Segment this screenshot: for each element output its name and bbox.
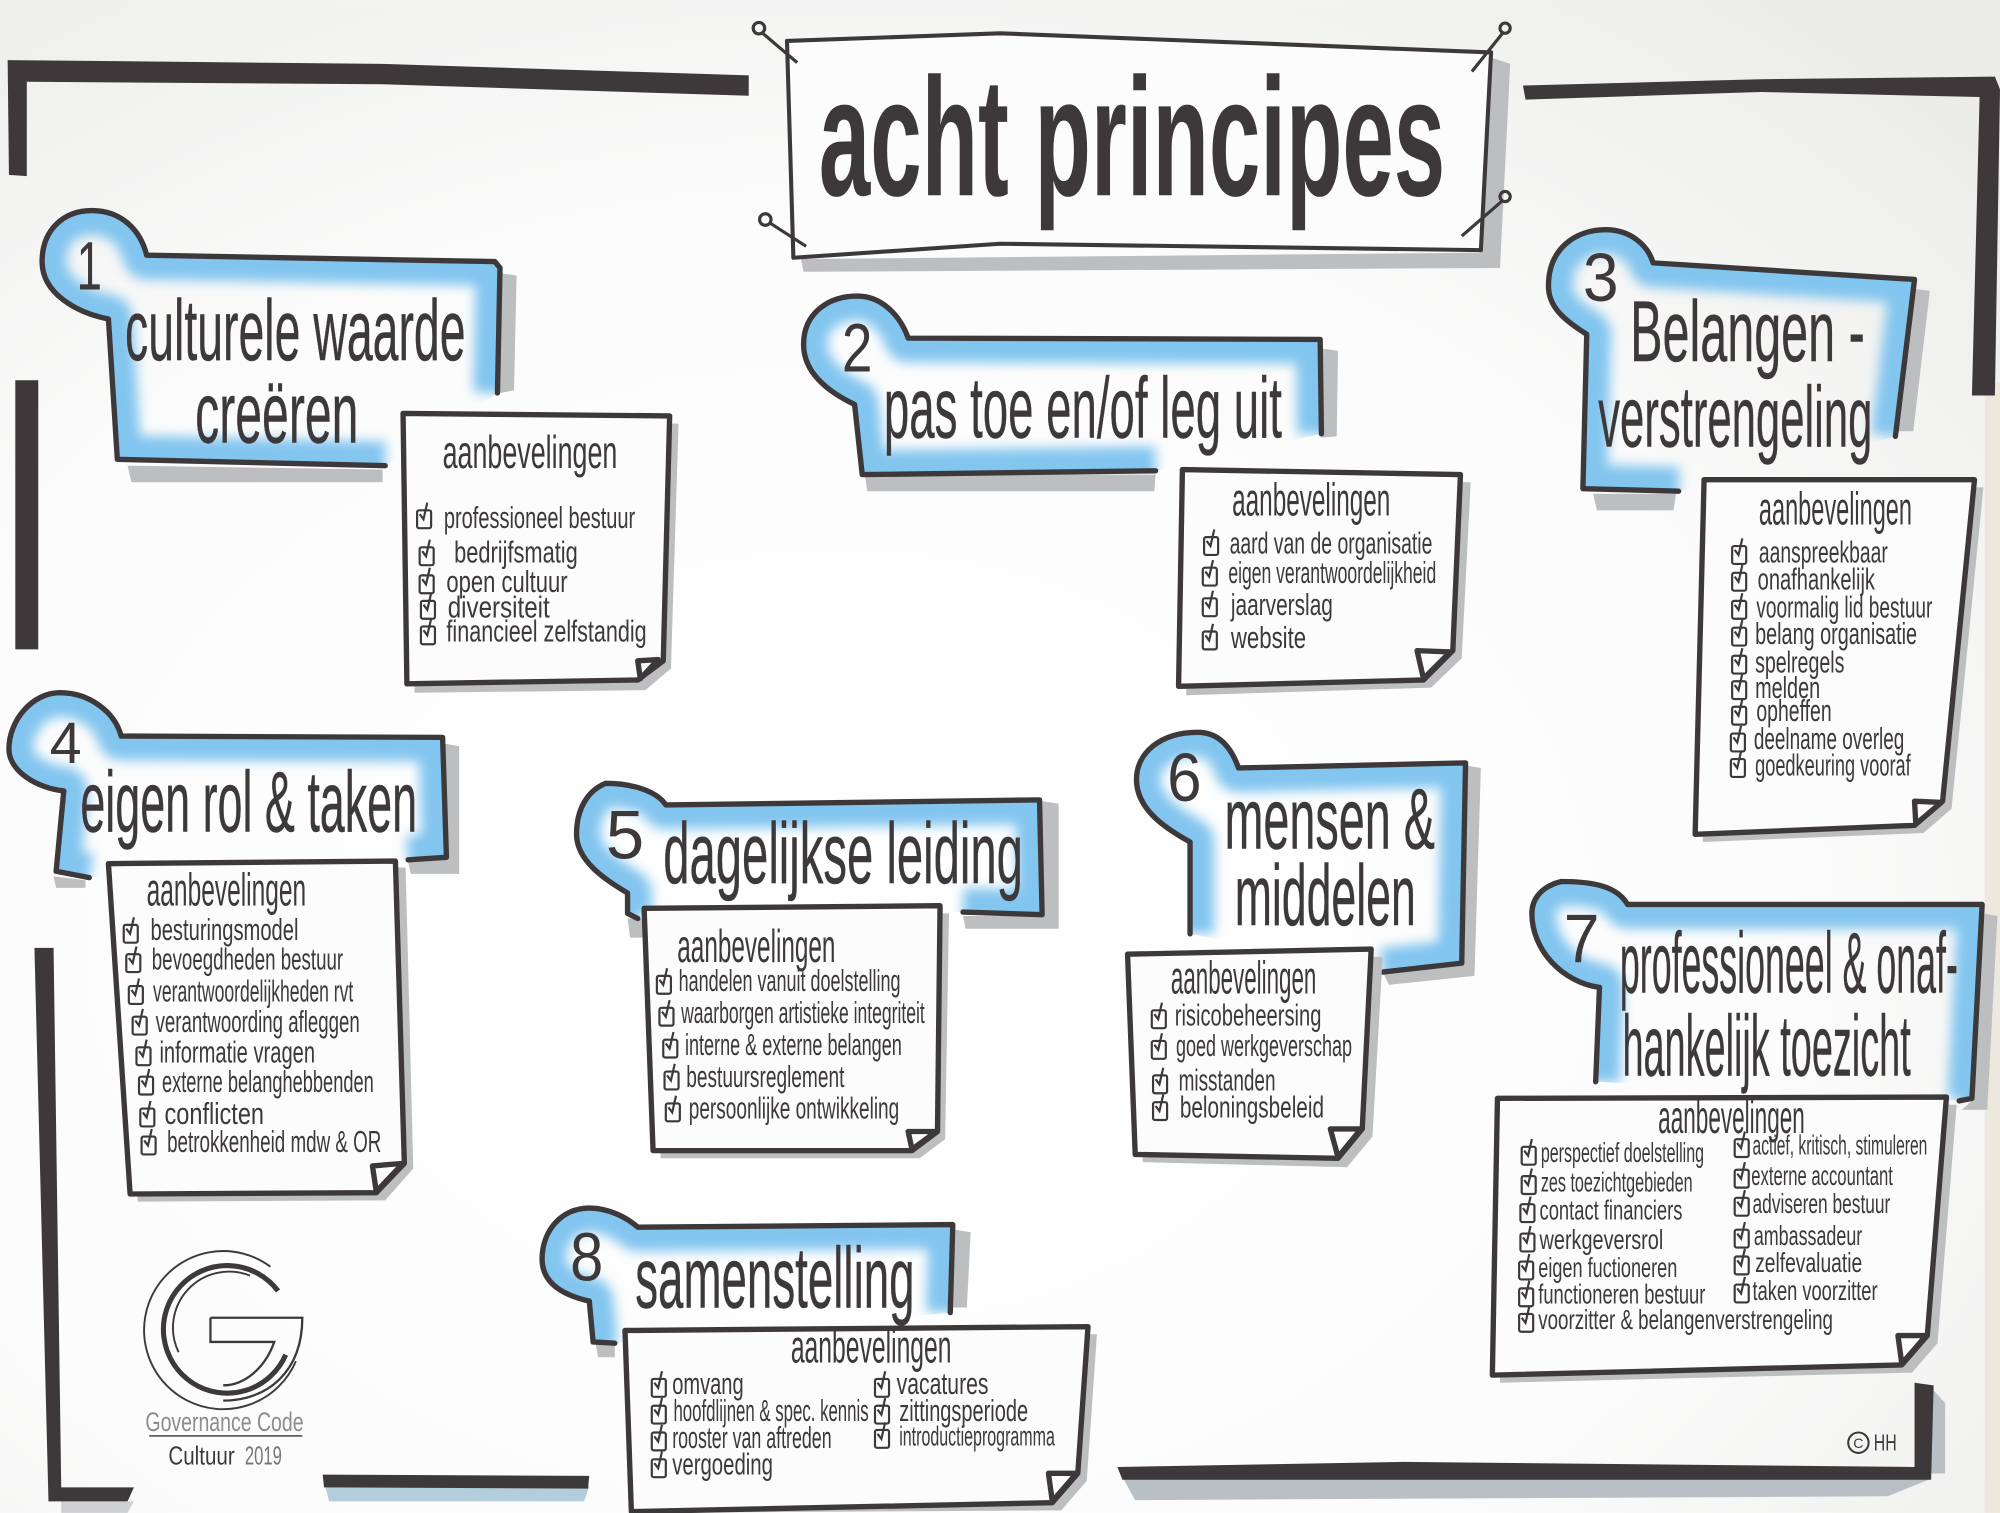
credit: copyright HH: HH bbox=[1874, 1429, 1897, 1455]
checklist: right column: adviseren bestuur bbox=[1753, 1188, 1890, 1219]
checklist: right column: zittingsperiode bbox=[899, 1394, 1028, 1428]
checklist: left column: rooster van aftreden bbox=[672, 1421, 832, 1455]
checklist bbox=[417, 501, 647, 649]
panel: principle 7 recommendations: aanbevelingen bbox=[1658, 1091, 1805, 1143]
panel: principle 6 recommendations: aanbevelingen bbox=[1171, 952, 1316, 1004]
panel: principle 2 recommendations bbox=[1179, 470, 1471, 695]
logo: Governance Code Cultuur 2019 bbox=[144, 1251, 304, 1470]
checklist: right column: externe accountant bbox=[1751, 1160, 1893, 1191]
checklist: left column: voorzitter & belangenverstrengeling bbox=[1538, 1304, 1833, 1335]
checklist: aard van de organisatie bbox=[1230, 527, 1432, 561]
checklist bbox=[1203, 527, 1436, 655]
heading: pas toe en/of leg uit bbox=[884, 360, 1282, 457]
checklist: diversiteit bbox=[448, 590, 550, 624]
checklist: aanspreekbaar bbox=[1759, 536, 1888, 570]
checklist: financieel zelfstandig bbox=[446, 615, 647, 649]
logo: Governance Code Cultuur 2019: 2019 bbox=[245, 1442, 282, 1470]
checklist: bestuursreglement bbox=[686, 1060, 845, 1094]
checklist: left column bbox=[1519, 1137, 1833, 1335]
panel: principle 6 recommendations bbox=[1128, 949, 1383, 1167]
icon: pins bbox=[753, 22, 1510, 246]
checklist: right column: vacatures bbox=[897, 1367, 989, 1401]
checklist: informatie vragen bbox=[159, 1036, 315, 1070]
number 5: 5 bbox=[606, 797, 644, 874]
checklist: onafhankelijk bbox=[1758, 562, 1875, 596]
panel: principle 3 banner bbox=[1548, 230, 1930, 510]
checklist: deelname overleg bbox=[1754, 722, 1904, 756]
checklist bbox=[1731, 536, 1932, 783]
checklist: waarborgen artistieke integriteit bbox=[681, 996, 925, 1030]
checklist: risicobeheersing bbox=[1175, 999, 1321, 1033]
checklist: belang organisatie bbox=[1755, 617, 1917, 651]
checklist: interne & externe belangen bbox=[685, 1028, 902, 1062]
heading: aanbevelingen bbox=[677, 920, 835, 972]
panel: principle 5 recommendations bbox=[644, 906, 949, 1158]
title text: acht principes bbox=[819, 43, 1445, 231]
checklist: externe belanghebbenden bbox=[162, 1065, 374, 1099]
checklist: left column bbox=[652, 1367, 869, 1482]
checklist: left column: functioneren bestuur bbox=[1538, 1279, 1705, 1310]
panel: principle 7 banner bbox=[1532, 882, 1997, 1110]
panel: principle 2 banner bbox=[804, 296, 1338, 491]
panel: principle 1 banner bbox=[42, 211, 517, 482]
checklist: besturingsmodel bbox=[151, 913, 298, 947]
checklist: right column: zelfevaluatie bbox=[1755, 1247, 1862, 1278]
checklist: right column bbox=[1735, 1129, 1927, 1306]
checklist: persoonlijke ontwikkeling bbox=[689, 1092, 899, 1126]
checklist: left column: vergoeding bbox=[672, 1448, 773, 1482]
checklist: bevoegdheden bestuur bbox=[152, 943, 343, 977]
checklist: goed werkgeverschap bbox=[1176, 1029, 1352, 1063]
checklist: left column: eigen fuctioneren bbox=[1538, 1252, 1677, 1283]
panel: principle 8 banner bbox=[542, 1208, 971, 1357]
credit: copyright HH: C bbox=[1853, 1435, 1864, 1451]
checklist bbox=[1152, 999, 1352, 1124]
checklist: betrokkenheid mdw & OR bbox=[167, 1125, 381, 1159]
panel: principle 7 recommendations bbox=[1492, 1091, 1957, 1383]
checklist: verantwoordelijkheden rvt bbox=[153, 974, 354, 1008]
checklist: conflicten bbox=[165, 1097, 264, 1131]
wordmark: Governance Code bbox=[145, 1407, 304, 1437]
checklist: misstanden bbox=[1179, 1064, 1276, 1098]
checklist: left column: omvang bbox=[672, 1367, 744, 1401]
panel: principle 4 banner bbox=[9, 693, 459, 888]
checklist: open cultuur bbox=[446, 565, 568, 599]
checklist: left column: werkgeversrol bbox=[1539, 1224, 1663, 1255]
panel: principle 6 banner bbox=[1136, 732, 1481, 985]
number 6: 6 bbox=[1167, 739, 1202, 816]
checklist: bedrijfsmatig bbox=[454, 536, 578, 570]
number 7: 7 bbox=[1564, 900, 1599, 977]
panel: principle 3 recommendations bbox=[1695, 480, 1983, 842]
checklist: right column bbox=[875, 1367, 1055, 1451]
panel: principle 1 banner: creëren bbox=[195, 365, 358, 462]
number 2: 2 bbox=[842, 309, 872, 386]
checklist bbox=[657, 964, 925, 1126]
heading: eigen rol & taken bbox=[80, 754, 417, 851]
checklist: opheffen bbox=[1756, 694, 1832, 728]
checklist: website bbox=[1230, 621, 1306, 655]
panel: principle 8 recommendations bbox=[625, 1320, 1097, 1513]
number 3: 3 bbox=[1583, 239, 1619, 316]
checklist: jaarverslag bbox=[1230, 588, 1333, 622]
checklist: right column: ambassadeur bbox=[1754, 1220, 1862, 1251]
panel: principle 1 recommendations bbox=[403, 413, 679, 693]
checklist: left column: hoofdlijnen & spec. kennis bbox=[673, 1394, 869, 1428]
panel: principle 6 banner: middelen bbox=[1235, 847, 1416, 944]
checklist: verantwoording afleggen bbox=[156, 1005, 360, 1039]
checklist: handelen vanuit doelstelling bbox=[679, 964, 901, 998]
number 4: 4 bbox=[50, 711, 82, 776]
heading: dagelijkse leiding bbox=[663, 805, 1023, 902]
checklist: eigen verantwoordelijkheid bbox=[1228, 556, 1436, 590]
number 8: 8 bbox=[570, 1219, 603, 1296]
heading: aanbevelingen bbox=[147, 864, 306, 916]
checklist: left column: zes toezichtgebieden bbox=[1541, 1166, 1693, 1197]
credit: copyright HH bbox=[1848, 1429, 1897, 1455]
checklist: spelregels bbox=[1755, 645, 1844, 679]
number 1: 1 bbox=[77, 228, 102, 305]
icon: G mark bbox=[144, 1251, 302, 1409]
title banner: acht principes bbox=[753, 22, 1510, 272]
checklist bbox=[124, 913, 381, 1159]
heading: mensen & bbox=[1224, 770, 1435, 867]
heading: aanbevelingen bbox=[1232, 473, 1390, 525]
checklist: professioneel bestuur bbox=[444, 501, 635, 535]
heading: aanbevelingen bbox=[443, 426, 617, 478]
heading: aanbevelingen bbox=[791, 1320, 952, 1372]
checklist: beloningsbeleid bbox=[1180, 1090, 1324, 1124]
checklist: right column: taken voorzitter bbox=[1753, 1275, 1878, 1306]
heading: samenstelling bbox=[635, 1230, 915, 1327]
checklist: right column: introductieprogramma bbox=[899, 1420, 1055, 1451]
panel: principle 5 banner bbox=[577, 783, 1059, 938]
heading: culturele waarde bbox=[125, 282, 466, 379]
panel: principle 4 recommendations bbox=[108, 861, 413, 1202]
checklist: melden bbox=[1755, 671, 1820, 705]
logo: Governance Code Cultuur 2019: Cultuur bbox=[168, 1442, 235, 1470]
checklist: left column: contact financiers bbox=[1540, 1195, 1682, 1226]
checklist: left column: perspectief doelstelling bbox=[1541, 1137, 1704, 1168]
